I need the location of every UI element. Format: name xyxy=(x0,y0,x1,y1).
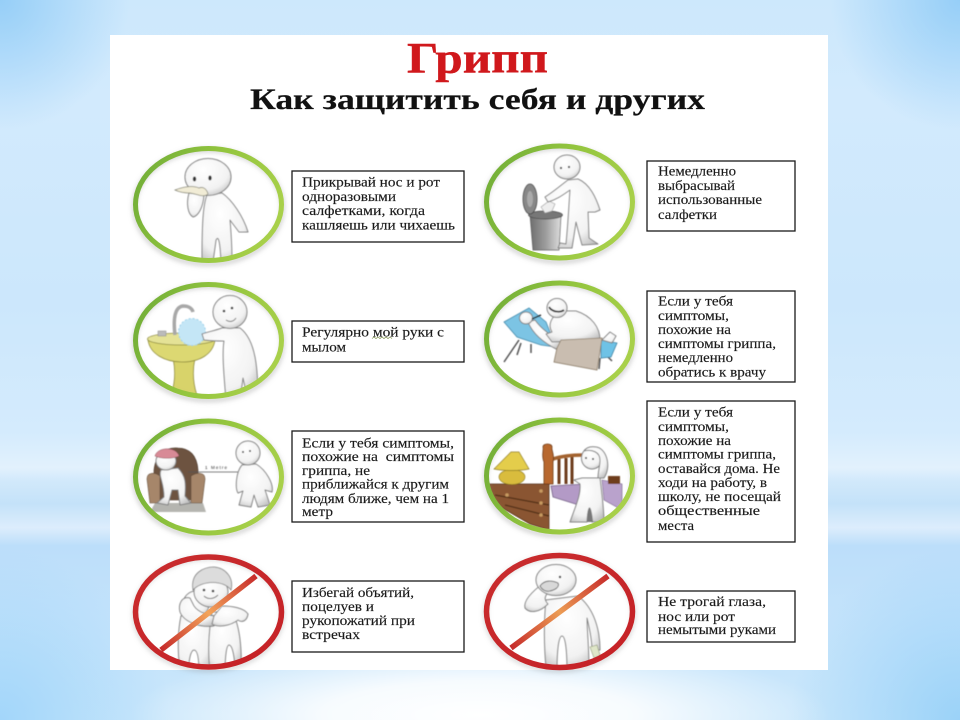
text box: do not touch face: нос или рот xyxy=(658,610,735,625)
text box: stay home: школу, не посещай xyxy=(658,490,782,505)
text box: do not touch face: Не трогай глаза, xyxy=(658,595,766,610)
text box: stay home: места xyxy=(658,519,695,534)
panel: wash hands xyxy=(134,284,464,400)
text box: see a doctor: похожие на xyxy=(658,323,732,338)
text box: cover nose: Прикрывай нос и рот xyxy=(302,176,440,191)
text box: stay home: ходи на работу, в xyxy=(658,476,767,491)
subtitle: Как защитить себя и других xyxy=(250,83,705,116)
text box: discard tissues: использованные xyxy=(658,193,762,208)
text box: discard tissues: Немедленно xyxy=(658,165,736,180)
text box: stay home: оставайся дома. Не xyxy=(658,462,780,477)
panel: cover nose and mouth xyxy=(134,148,464,264)
ring: green xyxy=(486,420,634,536)
panel: avoid hugs xyxy=(134,557,464,672)
text box: stay home: симптомы, xyxy=(658,420,729,435)
text box: avoid hugs: рукопожатий при xyxy=(302,614,416,629)
text box: keep distance: гриппа, не xyxy=(302,464,370,479)
text box: avoid hugs xyxy=(292,581,464,652)
text box: discard tissues xyxy=(647,161,795,231)
text box: stay home: симптомы гриппа, xyxy=(658,448,776,462)
panel: see a doctor xyxy=(486,283,795,398)
text box: keep distance: Если у тебя симптомы, xyxy=(302,437,454,452)
text box: keep distance: людям ближе, чем на 1 xyxy=(302,492,449,507)
illustration: person in bed with dresser and lamp xyxy=(485,444,622,530)
text box: wash hands: мылом xyxy=(302,341,346,356)
ring: green xyxy=(134,284,282,400)
prohibition sign: red ring and slash xyxy=(134,557,282,670)
illustration: two people hugging xyxy=(178,567,248,672)
text box: discard tissues: выбрасывай xyxy=(658,179,736,194)
text box: keep distance: приближайся к другим xyxy=(302,478,449,492)
text box: avoid hugs: Избегай объятий, xyxy=(302,586,414,601)
text box: see a doctor: Если у тебя xyxy=(658,295,734,310)
title: Грипп xyxy=(407,36,548,82)
panel: keep distance xyxy=(134,421,464,536)
text box: cover nose: одноразовыми xyxy=(302,190,397,205)
text box: cover nose: кашляешь или чихаешь xyxy=(302,218,455,234)
text box: do not touch face: немытыми руками xyxy=(658,623,777,638)
text box: cover nose xyxy=(292,171,464,242)
text box: discard tissues: салфетки xyxy=(658,208,718,223)
illustration: person and trash bin xyxy=(523,155,600,250)
text box: keep distance: похожие на симптомы xyxy=(302,450,455,465)
text box: see a doctor: симптомы гриппа, xyxy=(658,337,776,352)
text box: see a doctor: обратись к врачу xyxy=(658,366,766,381)
illustration: person with tissue xyxy=(175,158,248,262)
text box: do not touch face xyxy=(647,591,795,642)
illustration: sick person in armchair and standing person xyxy=(147,441,272,512)
text box: stay home: Если у тебя xyxy=(658,406,734,421)
text box: avoid hugs: встречах xyxy=(302,628,360,643)
text box: wash hands xyxy=(292,321,464,362)
text box: cover nose: салфетками, когда xyxy=(302,204,426,219)
text box: see a doctor: немедленно xyxy=(658,351,733,366)
ring: green xyxy=(486,283,634,398)
illustration: doctor and patient on a cot xyxy=(504,298,617,370)
illustration: sink and person xyxy=(148,296,258,400)
text box: stay home: похожие на xyxy=(658,434,732,449)
text box: see a doctor: симптомы, xyxy=(658,309,729,324)
illustration: person touching face xyxy=(525,564,600,668)
text box: keep distance: метр xyxy=(302,505,333,520)
text box: avoid hugs: поцелуев и xyxy=(302,600,375,615)
ring: green xyxy=(134,421,282,536)
text box: see a doctor xyxy=(647,291,795,382)
panel: discard tissues xyxy=(486,146,795,262)
panel: stay home xyxy=(485,401,795,542)
illustration: sick person in armchair and standing person: 1 Metre xyxy=(205,465,227,470)
text box: stay home: общественные xyxy=(658,504,760,519)
prohibition sign: red ring and slash xyxy=(486,556,634,670)
ring: green xyxy=(486,146,634,262)
text box: keep distance xyxy=(292,431,464,522)
text box: wash hands: Регулярно мой руки с xyxy=(302,326,444,341)
white poster panel xyxy=(110,35,828,670)
panel: do not touch face xyxy=(486,556,795,670)
ring: green xyxy=(134,148,282,264)
text box: stay home xyxy=(647,401,795,542)
